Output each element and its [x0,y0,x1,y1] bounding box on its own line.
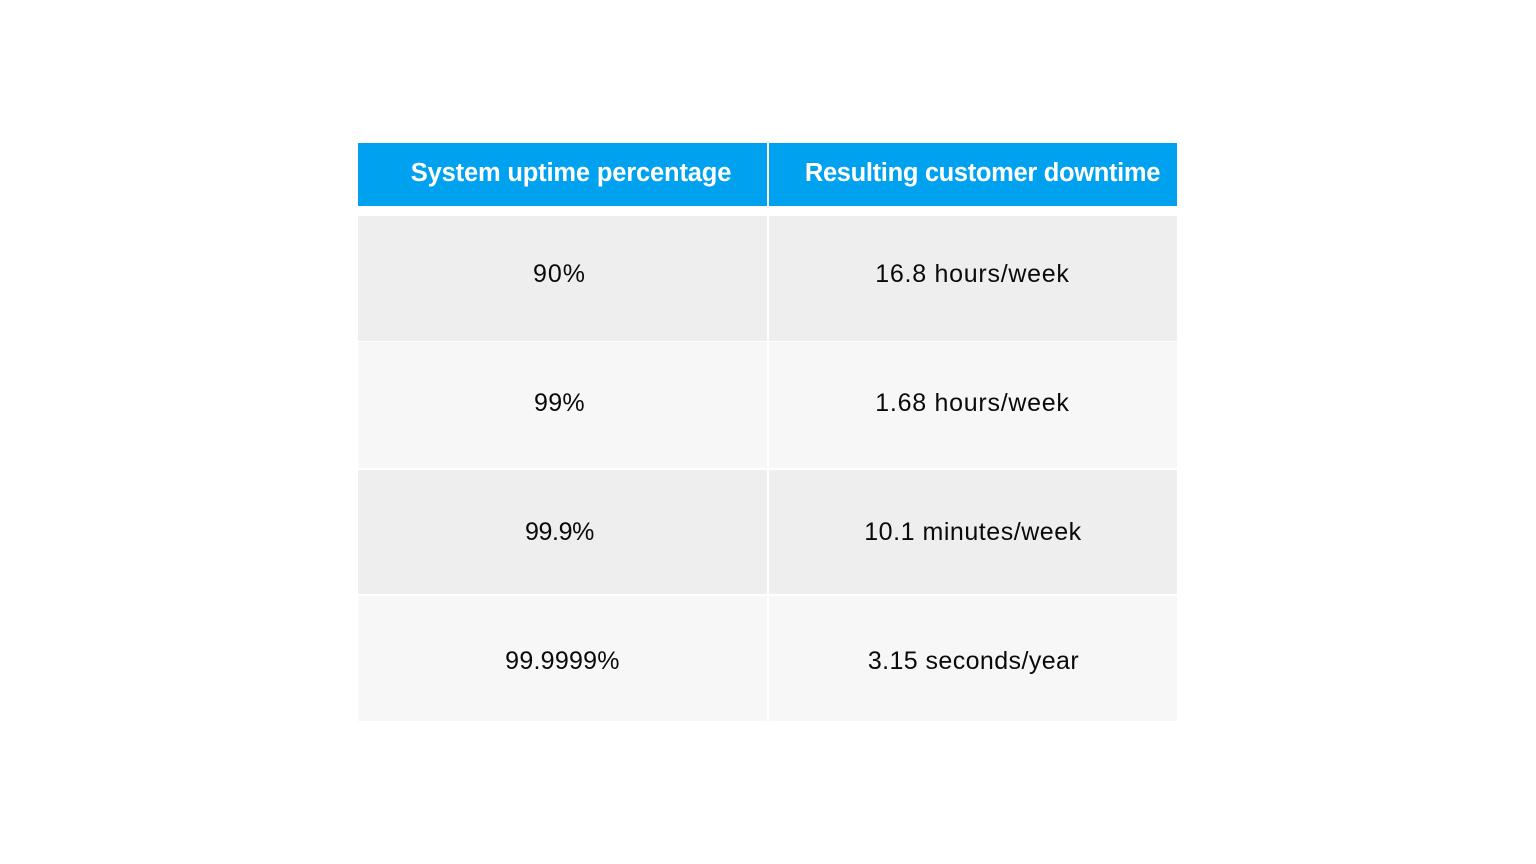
row 2 uptime: 99% [534,389,585,417]
row 2 uptime [358,342,767,468]
row 1 uptime [358,216,767,340]
table [358,143,1177,675]
header cell: system uptime percentage [358,142,767,206]
row 4 downtime: 3.15 seconds/year [868,647,1079,675]
row 2 downtime [769,342,1177,468]
header cell: system uptime percentage: System uptime percentage [411,159,731,187]
row 4 downtime [769,596,1177,721]
row 1 uptime: 90% [533,260,586,288]
row 4 uptime: 99.9999% [505,647,620,675]
row 3 uptime [358,470,767,594]
row 2 downtime: 1.68 hours/week [875,389,1070,417]
row 4 uptime [358,596,767,721]
header cell: resulting customer downtime: Resulting customer downtime [805,159,1160,187]
row 3 downtime [769,470,1177,594]
header cell: resulting customer downtime [769,142,1177,206]
row 3 uptime: 99.9% [525,518,594,546]
row 1 downtime [769,216,1177,340]
row 3 downtime: 10.1 minutes/week [864,518,1082,546]
row 1 downtime: 16.8 hours/week [875,260,1070,288]
